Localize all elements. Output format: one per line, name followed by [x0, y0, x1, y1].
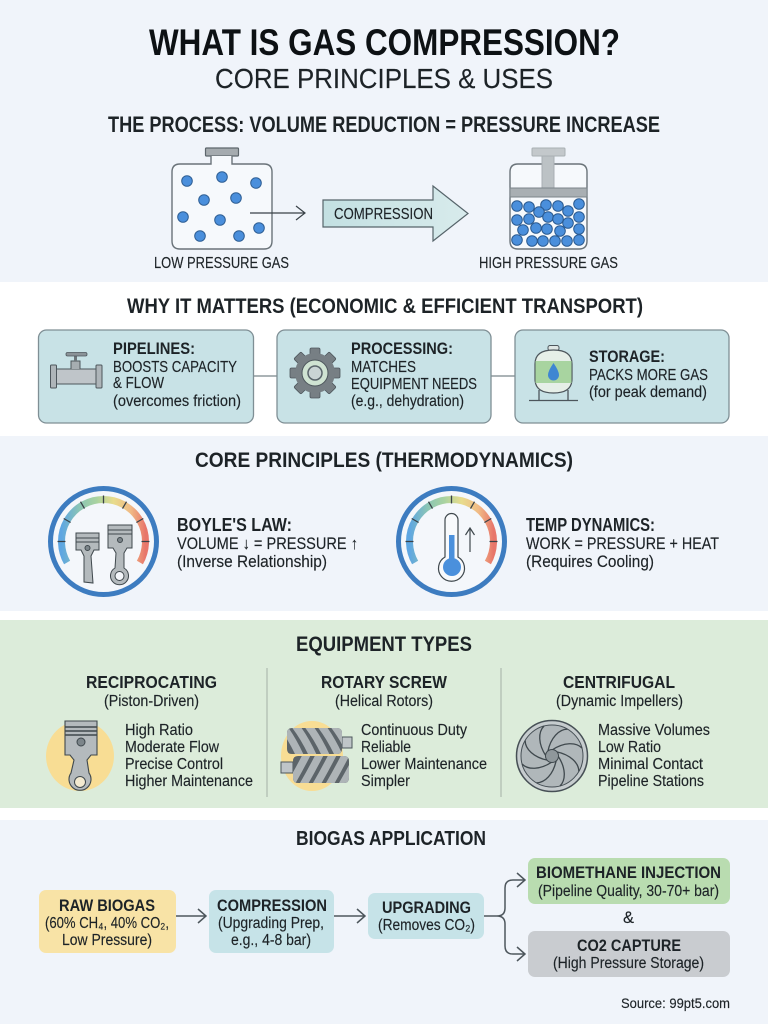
panel: why it matters — [38, 294, 729, 423]
icon: gear — [290, 348, 340, 398]
column: rotary screw: Lower Maintenance — [361, 756, 487, 773]
card: pipelines: & FLOW — [113, 375, 164, 392]
card: pipelines: (overcomes friction) — [113, 393, 241, 410]
arrow: out of tank — [250, 206, 305, 220]
box: co2 capture: (High Pressure Storage) — [553, 955, 704, 972]
column: centrifugal: Massive Volumes — [598, 722, 710, 739]
card: pipelines — [38, 330, 254, 423]
box: co2 capture — [528, 931, 730, 977]
column: reciprocating: Moderate Flow — [125, 739, 219, 756]
panel: biogas application — [39, 827, 730, 1011]
box: raw biogas — [39, 890, 176, 953]
text: boyle's law — [177, 515, 358, 571]
column: rotary screw: ROTARY SCREW — [321, 672, 447, 692]
card: processing: EQUIPMENT NEEDS — [351, 376, 477, 393]
arrow: compression: COMPRESSION — [334, 206, 433, 223]
column: centrifugal: CENTRIFUGAL — [563, 672, 675, 692]
title: WHAT IS GAS COMPRESSION? — [149, 22, 620, 63]
icon: high pressure cylinder — [510, 148, 587, 249]
label: high pressure gas: HIGH PRESSURE GAS — [479, 255, 618, 272]
subtitle: CORE PRINCIPLES & USES — [215, 63, 553, 94]
box: compression: (Upgrading Prep, — [218, 915, 324, 932]
panel: equipment types — [46, 633, 710, 797]
box: raw biogas: RAW BIOGAS — [59, 897, 155, 915]
box: compression — [209, 890, 334, 953]
card: processing: (e.g., dehydration) — [351, 393, 464, 410]
box: co2 capture: CO2 CAPTURE — [577, 937, 681, 955]
text: temp dynamics: WORK = PRESSURE + HEAT — [526, 535, 719, 553]
column: reciprocating: Precise Control — [125, 756, 223, 773]
box: raw biogas: Low Pressure) — [62, 932, 152, 949]
icon: piston — [65, 721, 97, 790]
column: reciprocating: High Ratio — [125, 722, 193, 739]
box: upgrading: (Removes CO₂) — [378, 917, 475, 934]
heading: why it matters: WHY IT MATTERS (ECONOMIC & EFFICIENT TRANSPORT) — [127, 294, 643, 318]
icon: storage tank — [529, 346, 578, 400]
text: temp dynamics: TEMP DYNAMICS: — [526, 515, 655, 535]
card: pipelines: PIPELINES: — [113, 340, 195, 358]
box: biomethane injection — [528, 858, 730, 904]
column: reciprocating: Higher Maintenance — [125, 773, 253, 790]
box: biomethane injection: (Pipeline Quality, 30-70+ bar) — [538, 883, 719, 900]
card: processing — [277, 330, 491, 423]
heading: core principles: CORE PRINCIPLES (THERMODYNAMICS) — [195, 449, 573, 472]
column: rotary screw: (Helical Rotors) — [335, 693, 433, 710]
column: centrifugal: Minimal Contact — [598, 756, 704, 773]
card: storage: STORAGE: — [589, 348, 665, 366]
column: reciprocating: RECIPROCATING — [86, 672, 217, 692]
column: centrifugal: (Dynamic Impellers) — [556, 693, 683, 710]
ampersand: & — [623, 909, 634, 927]
box: biomethane injection: BIOMETHANE INJECTION — [536, 864, 721, 882]
flow arrows — [176, 873, 525, 961]
column: centrifugal — [516, 672, 710, 792]
column: rotary screw: Continuous Duty — [361, 722, 467, 739]
arrow: compression — [323, 186, 468, 241]
column: rotary screw — [281, 672, 487, 791]
box: upgrading — [368, 893, 484, 939]
box: compression: COMPRESSION — [217, 897, 327, 915]
column: rotary screw: Reliable — [361, 739, 411, 756]
text: boyle's law: BOYLE'S LAW: — [177, 515, 292, 535]
text: boyle's law: (Inverse Relationship) — [177, 553, 327, 571]
heading: equipment types: EQUIPMENT TYPES — [296, 633, 472, 656]
gauge: thermometer — [398, 488, 504, 594]
panel: the process — [108, 112, 660, 272]
column: rotary screw: Simpler — [361, 773, 411, 790]
text: temp dynamics — [526, 515, 719, 571]
card: processing: PROCESSING: — [351, 340, 453, 358]
column: centrifugal: Pipeline Stations — [598, 773, 704, 790]
source: Source: 99pt5.com — [621, 995, 730, 1011]
icon: screw rotors — [280, 728, 352, 783]
icon: impeller — [516, 720, 588, 792]
icon: pipe valve — [50, 352, 102, 388]
box: raw biogas: (60% CH₄, 40% CO₂, — [45, 915, 169, 932]
text: temp dynamics: (Requires Cooling) — [526, 553, 654, 571]
heading: biogas application: BIOGAS APPLICATION — [296, 827, 486, 850]
label: low pressure gas: LOW PRESSURE GAS — [154, 255, 289, 272]
card: storage: (for peak demand) — [589, 384, 707, 401]
column: reciprocating: (Piston-Driven) — [104, 693, 199, 710]
column: centrifugal: Low Ratio — [598, 739, 661, 756]
text: boyle's law: VOLUME ↓ = PRESSURE ↑ — [177, 535, 358, 553]
box: compression: e.g., 4-8 bar) — [231, 932, 311, 949]
card: storage: PACKS MORE GAS — [589, 367, 708, 384]
card: processing: MATCHES — [351, 359, 416, 376]
panel: core principles — [50, 449, 719, 594]
column: reciprocating — [46, 672, 253, 791]
icon: low pressure tank — [172, 148, 272, 249]
card: pipelines: BOOSTS CAPACITY — [113, 359, 237, 376]
gauge: pistons — [50, 488, 156, 594]
card: storage — [515, 330, 729, 423]
box: upgrading: UPGRADING — [382, 899, 471, 917]
